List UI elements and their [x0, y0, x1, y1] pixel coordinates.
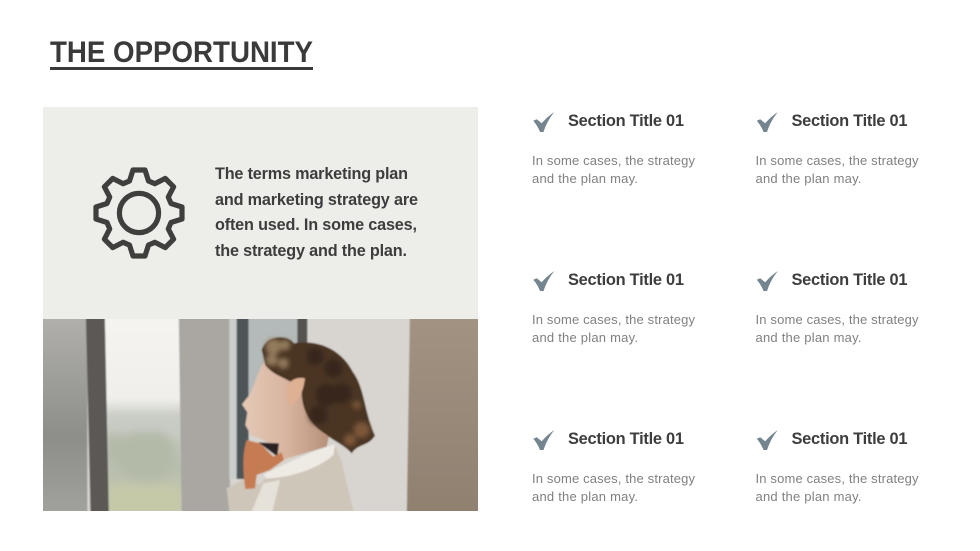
- callout text: often used. In some cases,: [215, 216, 417, 234]
- callout text: and marketing strategy are: [215, 191, 418, 209]
- icon: check: [757, 271, 778, 291]
- icon: check: [757, 430, 778, 450]
- section 1: [532, 112, 696, 186]
- section text: [532, 471, 696, 504]
- section text: and the plan may.: [532, 171, 638, 186]
- section text: [756, 153, 919, 186]
- collar: [264, 444, 335, 478]
- photo: woman on the phone at a window: [43, 319, 478, 511]
- section title: Section Title 01: [568, 271, 684, 289]
- section title: Section Title 01: [568, 112, 684, 130]
- section text: In some cases, the strategy: [532, 471, 696, 486]
- title: THE OPPORTUNITY: [50, 36, 313, 69]
- phone: [258, 442, 279, 457]
- callout text: the strategy and the plan.: [215, 242, 407, 260]
- section title: Section Title 01: [792, 112, 908, 130]
- trees seen through window: [108, 430, 176, 464]
- section 6: [756, 430, 919, 504]
- panel: callout: [43, 107, 478, 319]
- section text: In some cases, the strategy: [756, 153, 919, 168]
- icon: check: [533, 112, 554, 132]
- icon: check: [533, 430, 554, 450]
- section text: and the plan may.: [756, 171, 862, 186]
- section text: In some cases, the strategy: [756, 312, 919, 327]
- hand: [243, 440, 284, 489]
- section title: Section Title 01: [792, 430, 908, 448]
- section text: [756, 471, 919, 504]
- section text: [532, 153, 696, 186]
- section text: In some cases, the strategy: [532, 312, 696, 327]
- icon: check: [757, 112, 778, 132]
- section text: and the plan may.: [756, 330, 862, 345]
- section text: [756, 312, 919, 345]
- icon: gear: [96, 170, 182, 256]
- icon: check: [533, 271, 554, 291]
- skin: face and neck: [242, 362, 330, 462]
- section title: Section Title 01: [568, 430, 684, 448]
- callout text: [215, 165, 418, 260]
- section 4: [756, 271, 919, 345]
- section 2: [756, 112, 919, 186]
- section text: In some cases, the strategy: [756, 471, 919, 486]
- jacket: [226, 447, 354, 511]
- section 3: [532, 271, 696, 345]
- section text: and the plan may.: [532, 330, 638, 345]
- hair: [262, 337, 375, 453]
- section text: and the plan may.: [756, 489, 862, 504]
- section text: In some cases, the strategy: [532, 153, 696, 168]
- callout text: The terms marketing plan: [215, 165, 408, 183]
- section text: [532, 312, 696, 345]
- section title: Section Title 01: [792, 271, 908, 289]
- section text: and the plan may.: [532, 489, 638, 504]
- section 5: [532, 430, 696, 504]
